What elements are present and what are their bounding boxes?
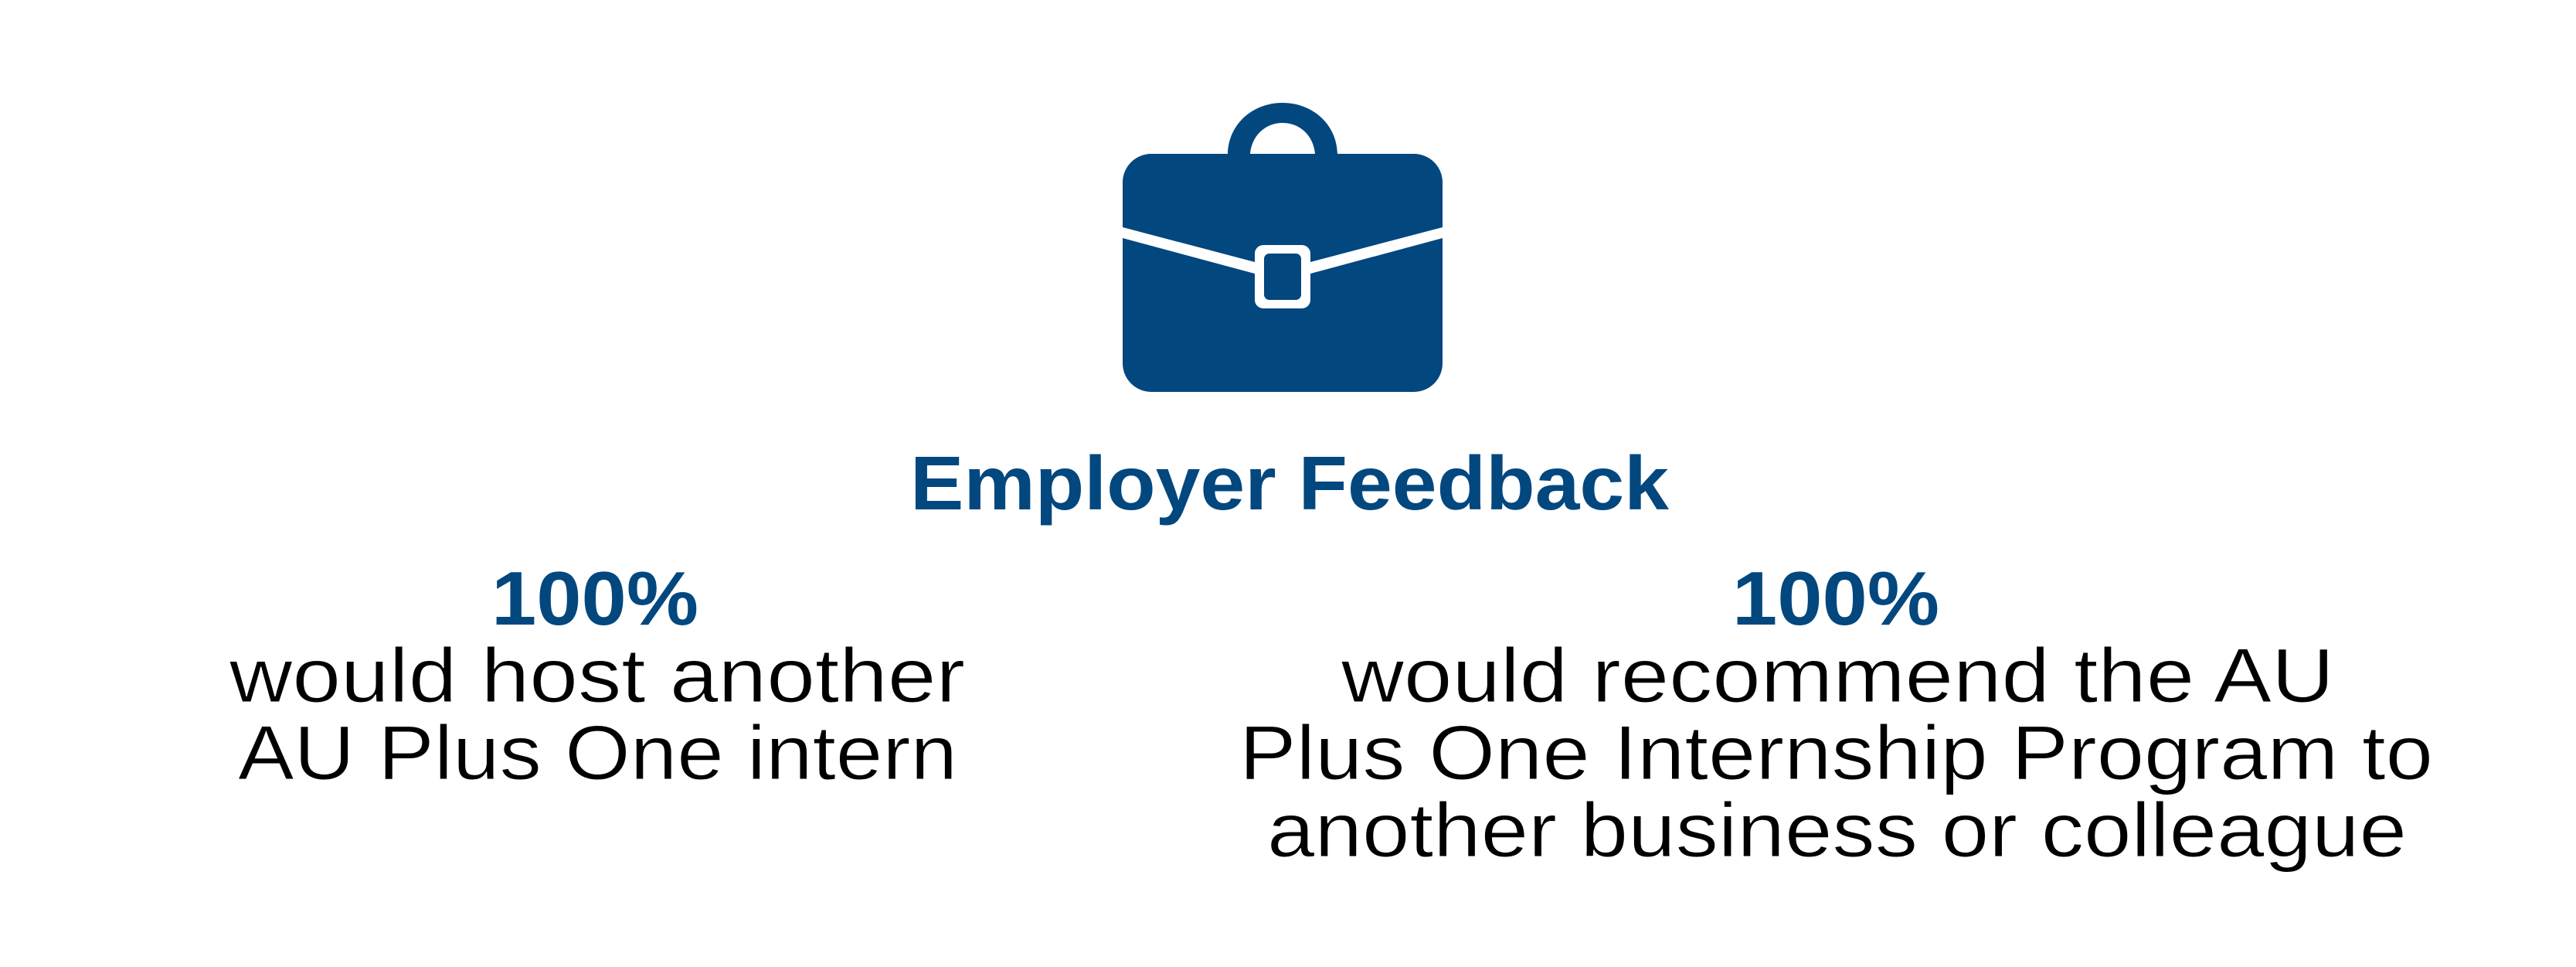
stat: 100% would recommend the program — [1239, 556, 2433, 873]
stat description — [229, 632, 965, 795]
stat description: Plus One Internship Program to — [1239, 710, 2433, 795]
stat description: another business or colleague — [1267, 787, 2407, 873]
heading: Employer Feedback: Employer Feedback — [910, 441, 1670, 526]
stat number: 100% — [1732, 556, 1939, 641]
stat description: would host another — [229, 632, 965, 718]
stat number: 100% — [491, 556, 698, 641]
stat description: would recommend the AU — [1341, 632, 2334, 718]
stat description — [1239, 632, 2433, 873]
stat description: AU Plus One intern — [238, 710, 957, 795]
icon: briefcase — [1123, 103, 1443, 392]
stat: 100% would host another intern — [229, 556, 965, 795]
